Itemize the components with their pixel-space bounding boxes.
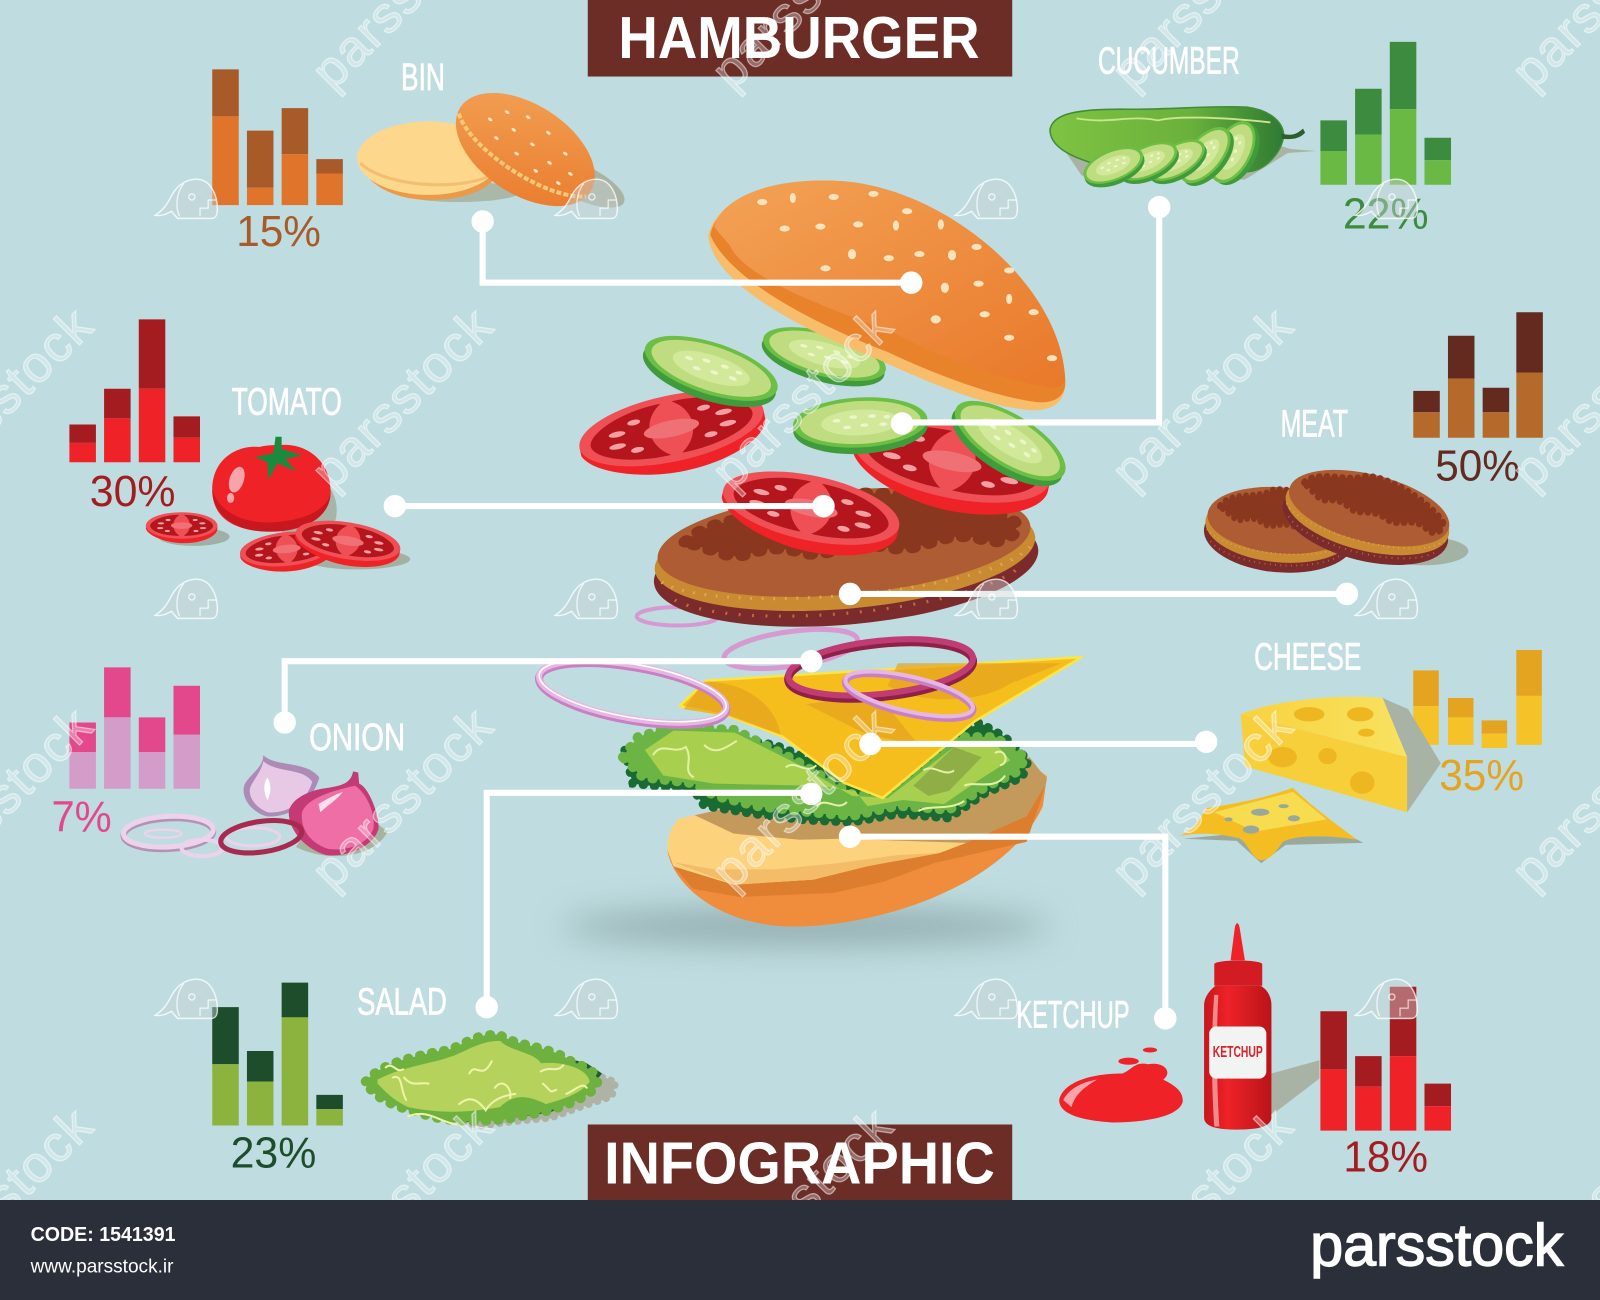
label: cucumber: CUCUMBER — [1098, 39, 1240, 81]
chart: ketchup: 18% — [1343, 1132, 1428, 1181]
footer bar: parsstock — [1310, 1211, 1564, 1278]
burger ground shadow — [561, 906, 1051, 947]
chart: salad: 23% — [231, 1128, 316, 1177]
watermark layer: parsstock — [1100, 697, 1303, 900]
burger: cucumber slice behind bun — [756, 316, 891, 397]
watermark layer: parsstock — [700, 1097, 903, 1300]
burger: lower onion rings — [535, 631, 977, 736]
burger: cheese slice — [680, 657, 1082, 798]
watermark layer: parsstock — [1100, 297, 1303, 500]
connector: onion — [277, 653, 819, 731]
footer bar — [0, 1200, 1600, 1300]
connector: meat — [842, 586, 1355, 602]
label: meat: MEAT — [1281, 403, 1348, 445]
label: tomato: TOMATO — [232, 380, 342, 422]
chart: tomato: 30% — [90, 467, 176, 516]
connector: cheese — [862, 734, 1214, 752]
chart: cucumber — [1320, 42, 1451, 239]
footer bar: www.parsstock.ir — [30, 1255, 174, 1277]
connector: salad — [479, 786, 819, 1015]
illustration: onions — [123, 755, 388, 858]
chart: ketchup — [1320, 987, 1451, 1181]
burger: cucumber slice left — [635, 322, 785, 421]
burger: top bun — [708, 181, 1065, 410]
chart: salad — [212, 983, 343, 1177]
label: onion: ONION — [309, 716, 405, 758]
watermark layer: parsstock — [300, 697, 503, 900]
burger: tomato slice left — [573, 377, 772, 491]
chart: meat — [1413, 312, 1543, 491]
watermark layer: parsstock — [700, 297, 903, 500]
chart: cheese: 35% — [1439, 751, 1524, 800]
illustration: tomato and slices — [146, 437, 410, 576]
watermark layer: parsstock — [300, 297, 503, 500]
chart: cucumber: 22% — [1343, 190, 1429, 239]
illustration: salad — [363, 1035, 616, 1127]
burger: tomato slice right — [844, 405, 1057, 530]
burger: upper onion rings — [637, 607, 860, 676]
label: ketchup: KETCHUP — [1016, 994, 1130, 1036]
title banner: infographic: INFOGRAPHIC — [604, 1130, 995, 1197]
label: salad: SALAD — [357, 980, 447, 1022]
connector: cucumber — [894, 199, 1167, 432]
burger: lettuce — [622, 722, 1029, 822]
burger: meat patty — [647, 474, 1043, 641]
illustration: cucumber — [1050, 107, 1316, 195]
illustration: ketchup bottle and puddle — [1059, 923, 1319, 1130]
burger: cucumber slice right — [939, 385, 1077, 502]
watermark layer: parsstock — [700, 697, 903, 900]
footer bar: CODE: 1541391 — [31, 1224, 176, 1246]
illustration: cheese — [1178, 697, 1441, 863]
illustration: ketchup bottle and puddle: KETCHUP — [1213, 1044, 1263, 1061]
burger: tomato slice on patty — [714, 458, 906, 569]
chart: onion: 7% — [52, 793, 112, 842]
chart: cheese — [1413, 650, 1542, 800]
illustration: meat patties — [1201, 455, 1468, 580]
illustration: bun halves — [357, 70, 631, 229]
label: cheese: CHEESE — [1254, 635, 1361, 677]
connector: tomato — [387, 498, 832, 514]
label: bin: BIN — [401, 56, 445, 98]
chart: onion — [52, 667, 200, 842]
watermark layer: parsstock — [300, 1097, 503, 1300]
watermark layer: parsstock — [1100, 1097, 1303, 1300]
connector: bun — [474, 213, 919, 291]
connector: ketchup — [842, 829, 1173, 1027]
watermark animal icons — [155, 179, 1417, 1018]
chart: meat: 50% — [1435, 442, 1520, 491]
chart: bun — [212, 69, 343, 256]
chart: bun: 15% — [236, 207, 321, 256]
burger: bottom bun — [667, 755, 1047, 927]
chart: tomato — [69, 319, 200, 516]
title banner: hamburger: HAMBURGER — [618, 4, 980, 71]
burger: cucumber slice centre — [792, 394, 929, 457]
